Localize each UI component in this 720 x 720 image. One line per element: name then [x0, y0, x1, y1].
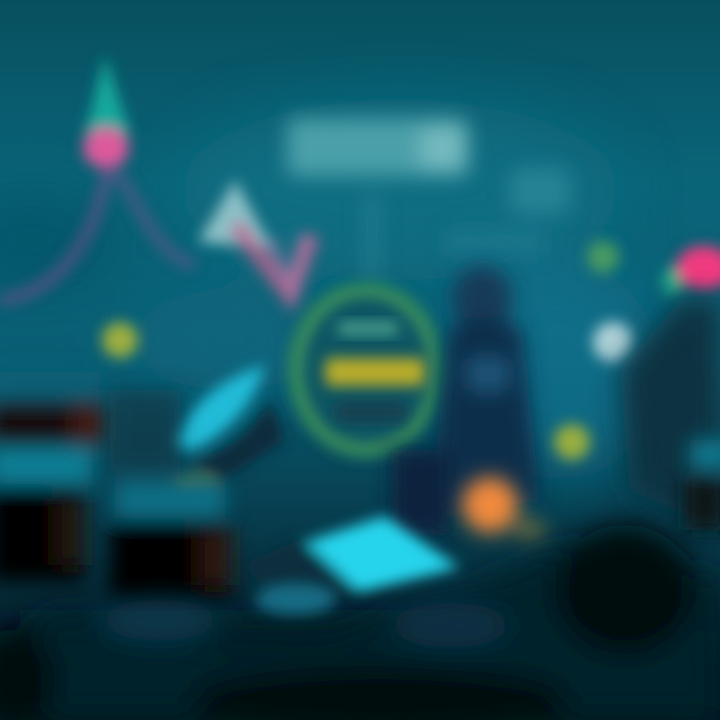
chart line: middle peak — [198, 180, 312, 295]
left stacked dark objects — [0, 372, 106, 581]
center-left dark object — [110, 390, 233, 600]
bottom dark foreground — [0, 525, 720, 720]
right pink marker — [663, 246, 720, 296]
orange glow — [462, 477, 546, 539]
headline glow block — [287, 118, 570, 280]
cyan leaf — [172, 365, 285, 494]
right accent — [685, 440, 720, 530]
right dark column — [620, 300, 720, 530]
coin badge — [296, 290, 436, 450]
cyan tablet — [240, 516, 460, 615]
dots — [102, 241, 633, 460]
dark figure — [392, 266, 540, 535]
chart line: left spike — [0, 55, 195, 300]
